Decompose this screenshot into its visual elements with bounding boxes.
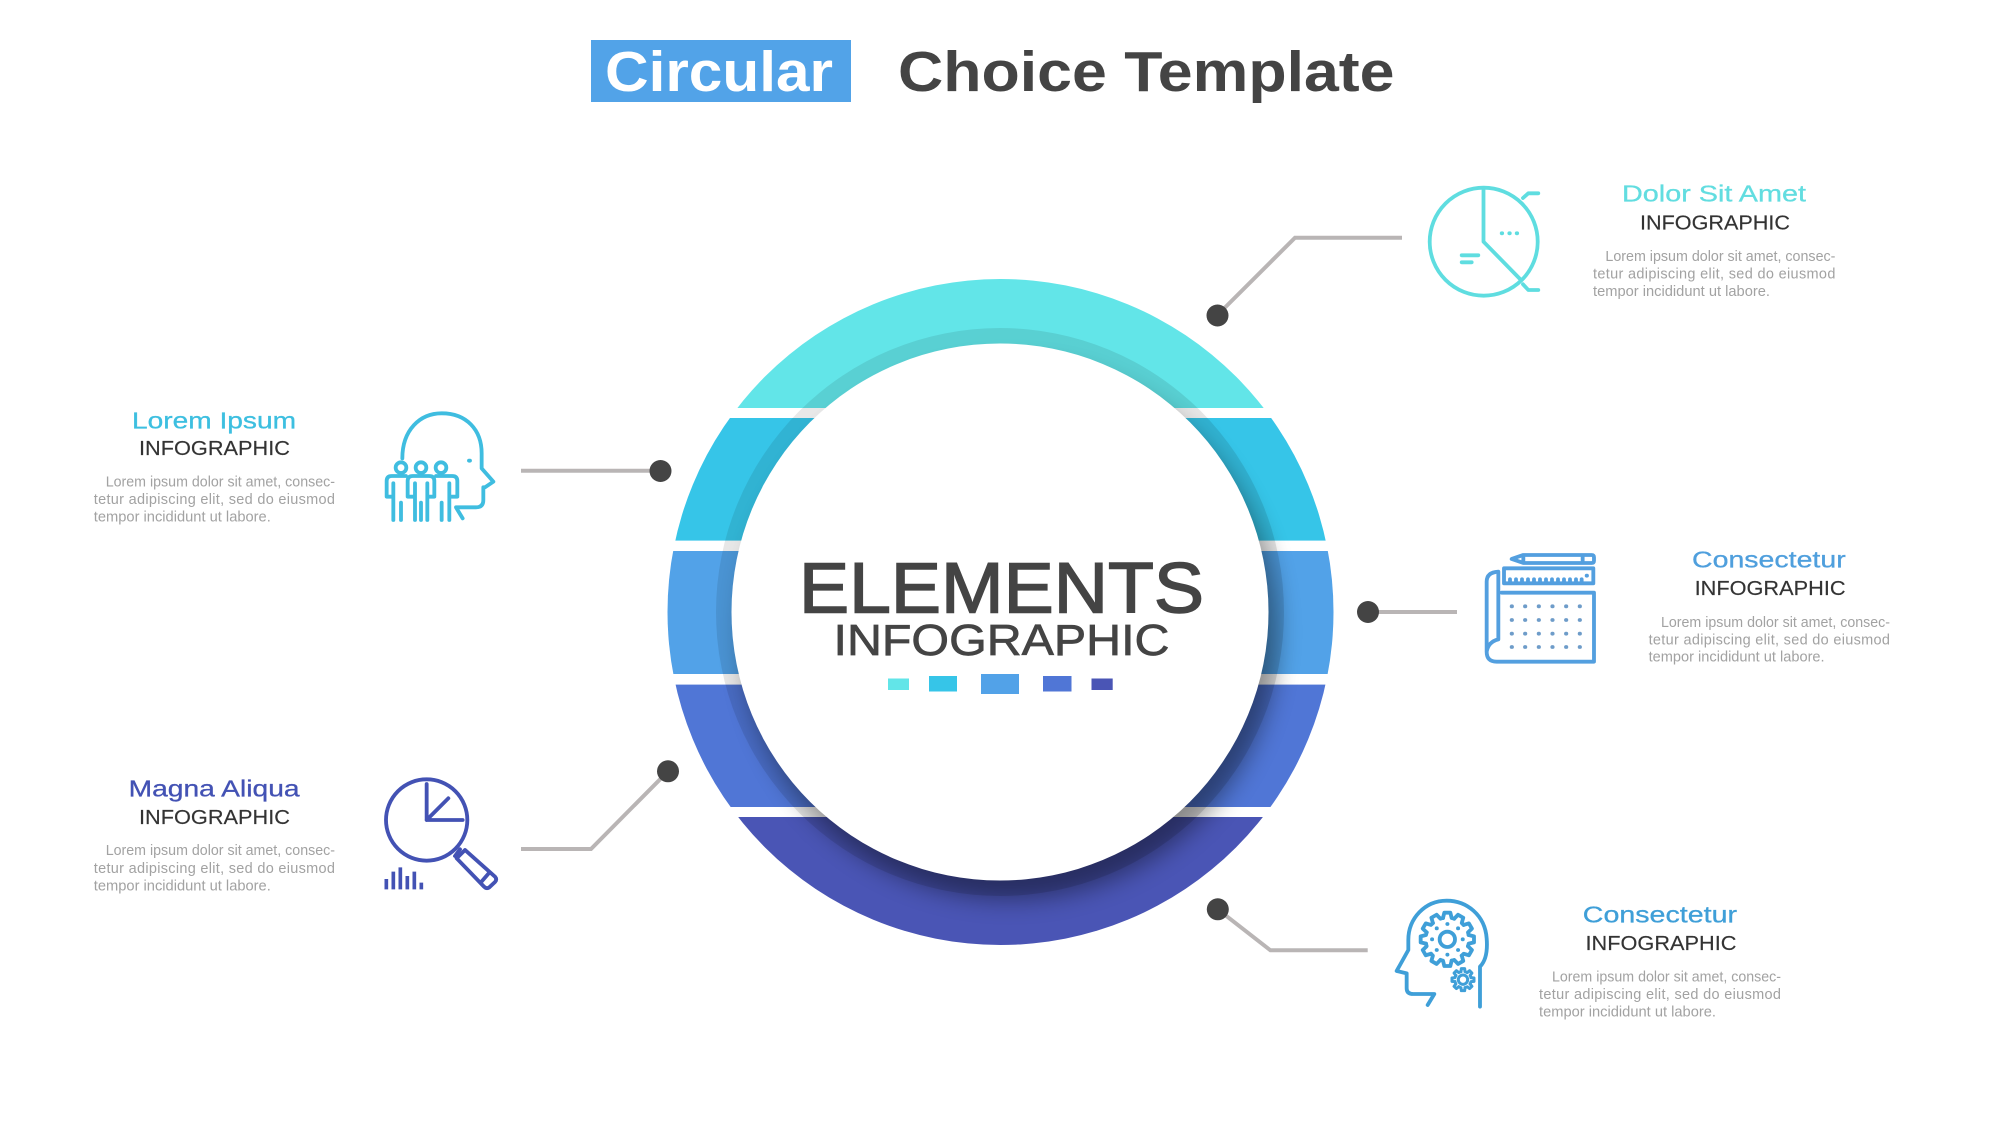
icon: calendar with pencil and ruler: [1487, 555, 1594, 662]
description: tetur adipiscing elit, sed do eiusmod: [94, 861, 335, 877]
description: Lorem ipsum dolor sit amet, consec-: [1661, 615, 1890, 631]
description: tempor incididunt ut labore.: [94, 510, 271, 526]
subheading: INFOGRAPHIC: [139, 438, 290, 460]
center color key squares: [888, 674, 1113, 694]
title: [591, 40, 1394, 104]
subheading: INFOGRAPHIC: [1640, 212, 1790, 234]
panel: Consectetur (bottom): [1207, 898, 1781, 1021]
description: tetur adipiscing elit, sed do eiusmod: [94, 492, 335, 508]
description: Lorem ipsum dolor sit amet, consec-: [106, 475, 335, 491]
center white disc: [732, 344, 1268, 880]
description: tempor incididunt ut labore.: [94, 879, 271, 895]
heading: Magna Aliqua: [129, 776, 301, 802]
description: tempor incididunt ut labore.: [1593, 284, 1770, 300]
description: Lorem ipsum dolor sit amet, consec-: [106, 843, 335, 859]
infographic canvas: [94, 40, 1890, 1020]
description: Lorem ipsum dolor sit amet, consec-: [1552, 970, 1781, 986]
center heading: [799, 550, 1204, 665]
ring segments: [660, 270, 1340, 947]
title highlight box: [591, 40, 851, 102]
title word: Circular: Circular: [605, 40, 833, 104]
panel: Lorem Ipsum: [94, 407, 672, 526]
icon: head with people: [387, 413, 493, 520]
description: tetur adipiscing elit, sed do eiusmod: [1649, 632, 1890, 648]
connector: [521, 760, 679, 849]
description: [94, 475, 335, 526]
circular ring diagram: [660, 270, 1340, 947]
inner shadow ring: [716, 328, 1284, 900]
icon: head with gears: [1397, 901, 1487, 1007]
heading: Consectetur: [1692, 547, 1846, 573]
description: tempor incididunt ut labore.: [1539, 1005, 1716, 1021]
subheading: INFOGRAPHIC: [139, 807, 290, 829]
center heading: INFOGRAPHIC: [834, 616, 1170, 665]
connector: [1207, 898, 1368, 950]
heading: Lorem Ipsum: [132, 407, 296, 433]
description: [1593, 249, 1836, 300]
panel: Dolor Sit Amet: [1206, 181, 1836, 326]
heading: Dolor Sit Amet: [1622, 181, 1807, 207]
title words: Choice Template: Choice Template: [898, 40, 1394, 104]
description: [1649, 615, 1890, 666]
description: Lorem ipsum dolor sit amet, consec-: [1605, 249, 1836, 265]
connector: [521, 460, 672, 482]
connector: [1206, 238, 1402, 326]
description: [94, 843, 335, 895]
icon: pie chart: [1430, 188, 1538, 296]
subheading: INFOGRAPHIC: [1695, 578, 1846, 600]
center heading: ELEMENTS: [799, 550, 1204, 628]
icon: magnifier with pie chart: [386, 779, 496, 889]
description: tetur adipiscing elit, sed do eiusmod: [1539, 987, 1781, 1003]
subheading: INFOGRAPHIC: [1586, 933, 1736, 955]
description: tetur adipiscing elit, sed do eiusmod: [1593, 266, 1835, 282]
heading: Consectetur: [1583, 902, 1737, 928]
description: tempor incididunt ut labore.: [1649, 650, 1825, 666]
connector: [1357, 601, 1457, 623]
panel: Magna Aliqua: [94, 760, 679, 895]
panel: Consectetur (right): [1357, 547, 1890, 666]
description: [1539, 970, 1781, 1021]
